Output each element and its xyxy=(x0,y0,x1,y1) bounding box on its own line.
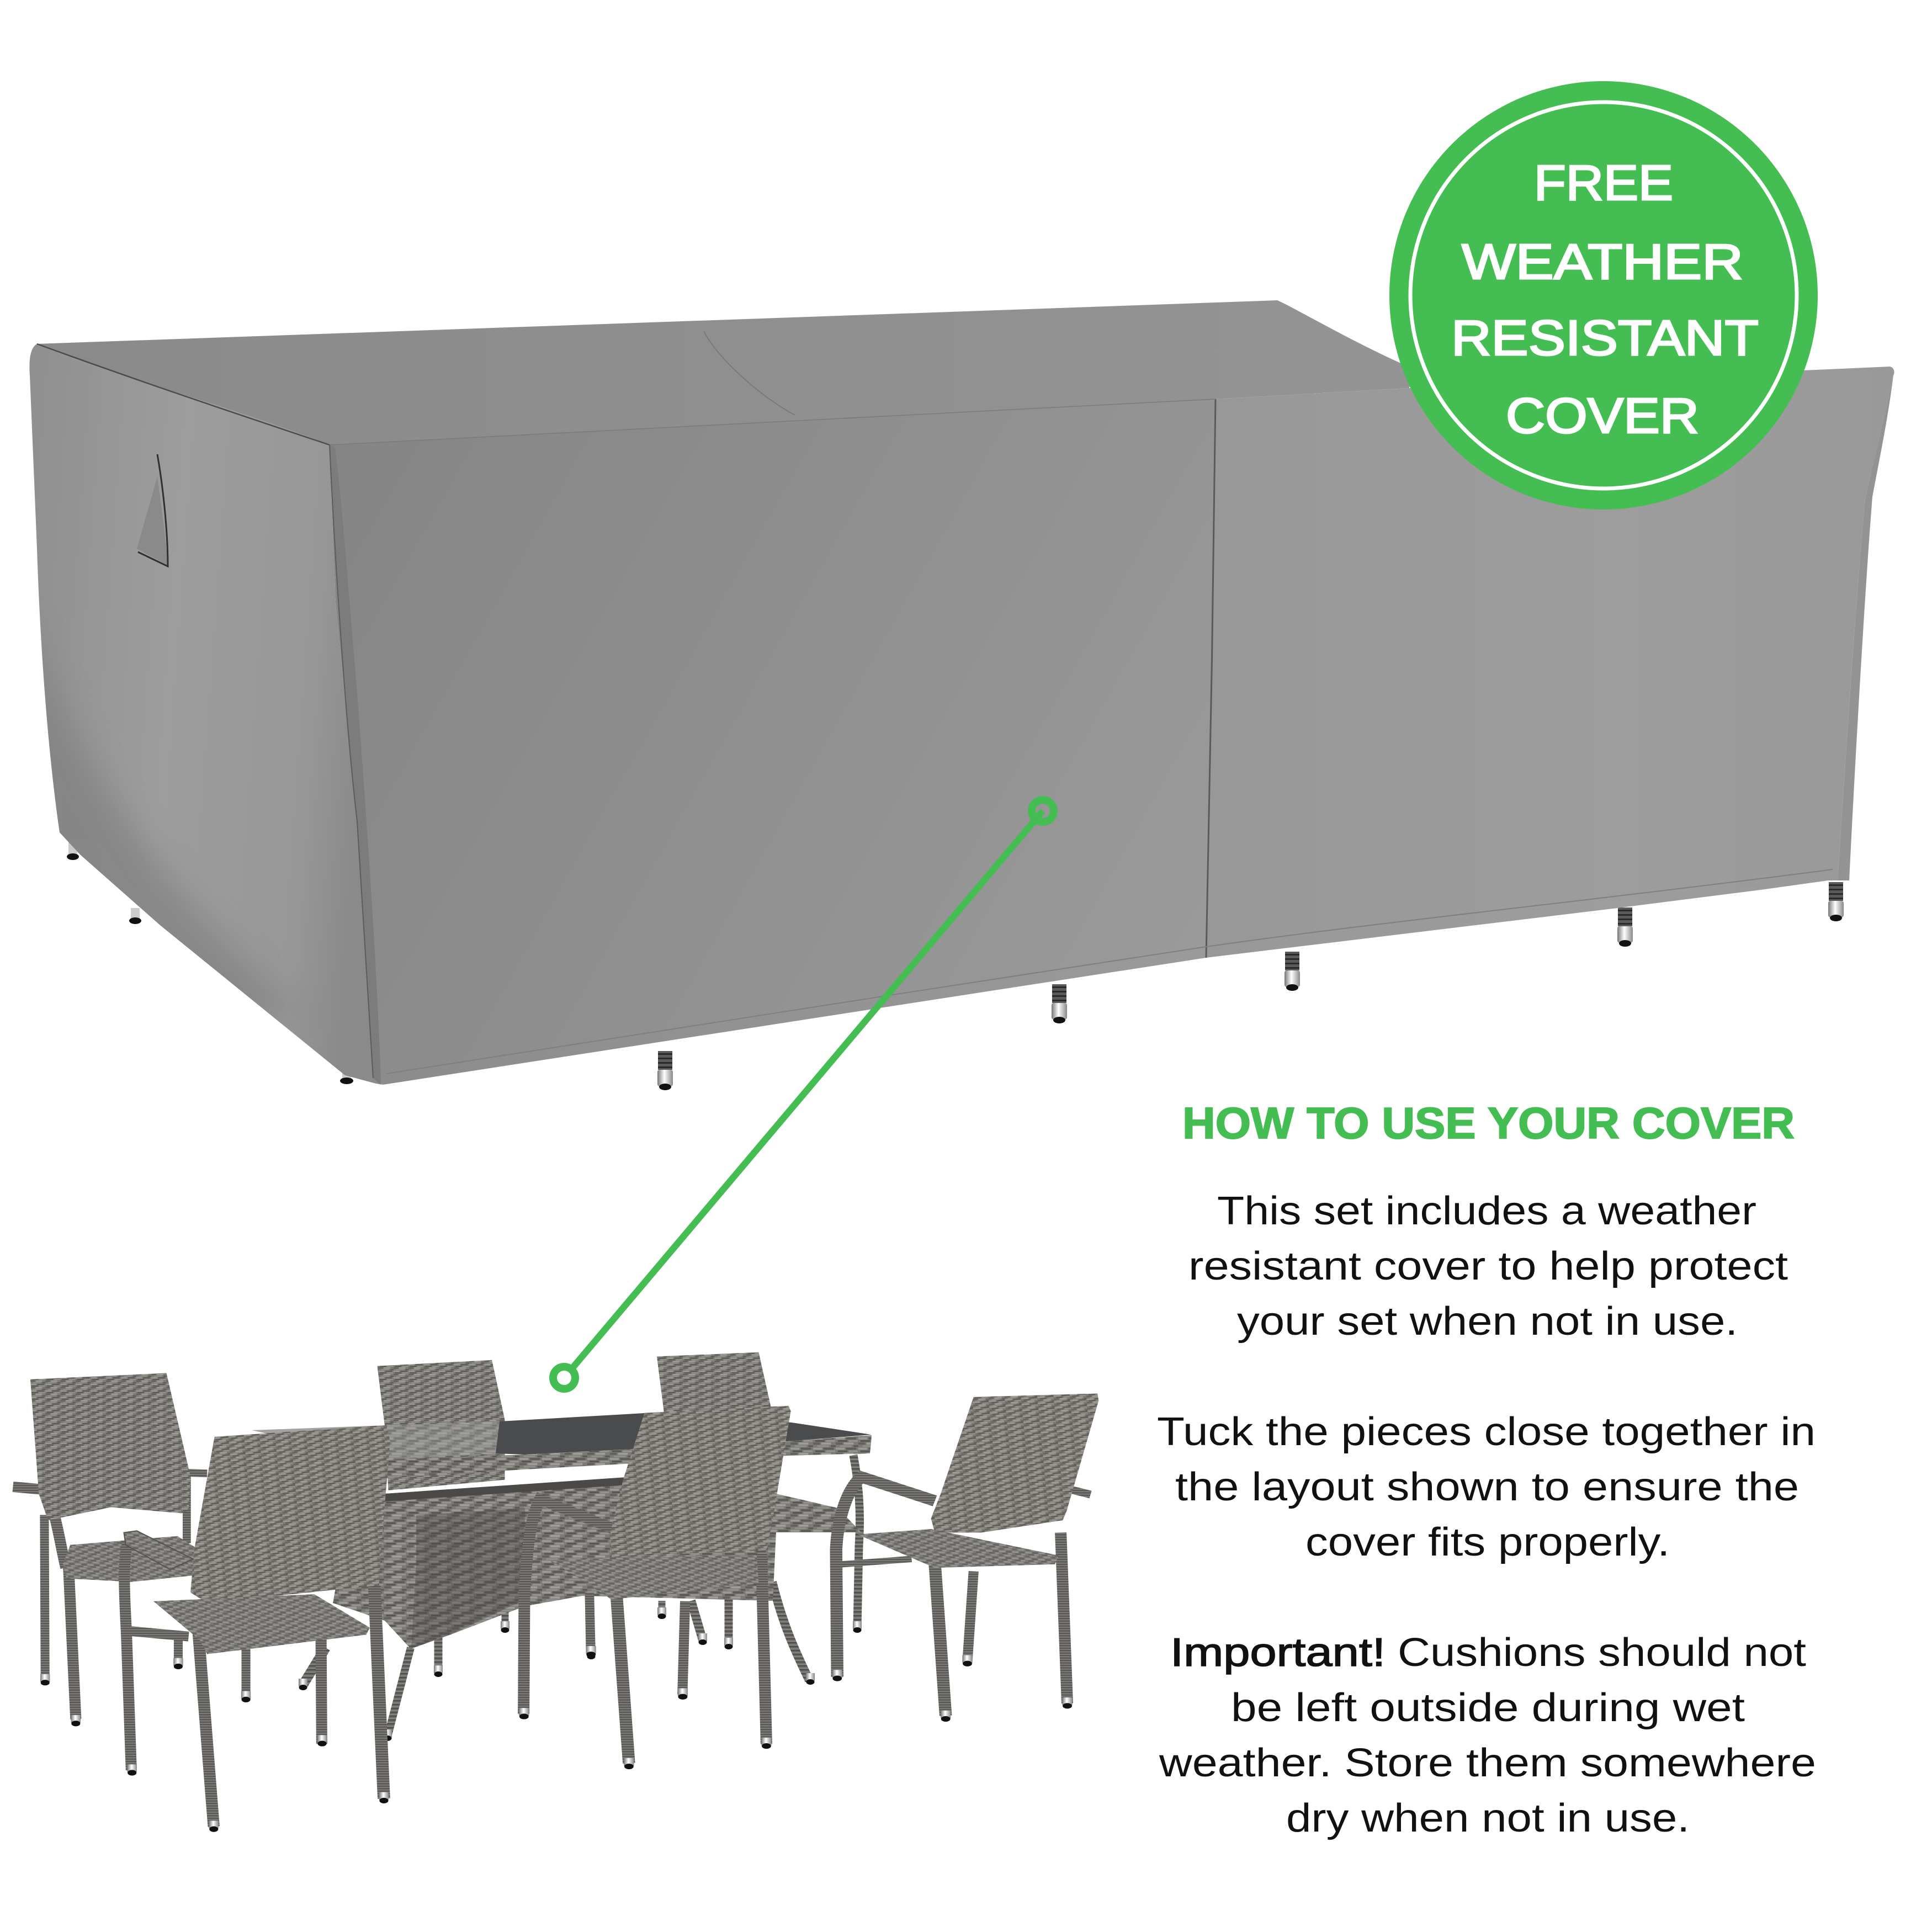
paragraph: what the set includes: This set includes a weather xyxy=(1217,1189,1756,1233)
table xyxy=(299,1455,862,1741)
table shelf dark band xyxy=(385,1477,627,1501)
table rear legs xyxy=(303,1455,860,1735)
table feet xyxy=(299,1607,862,1741)
chair: rear left xyxy=(13,1373,251,1726)
chair: right xyxy=(832,1393,1098,1722)
heading: HOW TO USE YOUR COVER xyxy=(1182,1098,1795,1148)
paragraph: important cushion note: dry when not in use. xyxy=(1286,1796,1690,1840)
badge: free weather resistant cover xyxy=(1389,81,1818,509)
cover handle xyxy=(137,454,168,566)
uncovered furniture set xyxy=(13,1352,1098,1832)
table top glass, light section xyxy=(252,1421,500,1459)
badge: free weather resistant cover: WEATHER xyxy=(1462,235,1743,290)
cover left panel shadow xyxy=(42,654,278,1018)
callout line linking cover to furniture xyxy=(553,800,1054,1389)
table under panel xyxy=(333,1477,861,1649)
cover corner seam xyxy=(330,445,381,1085)
cover front panel xyxy=(330,399,1216,1085)
paragraph: what the set includes: resistant cover to help protect xyxy=(1188,1244,1788,1288)
paragraph: important cushion note: Important! xyxy=(1170,1631,1386,1675)
chair: front left xyxy=(124,1425,390,1832)
table top rim xyxy=(386,1435,872,1478)
paragraph: what the set includes: your set when not in use. xyxy=(1237,1299,1738,1344)
cover marker ring xyxy=(1032,800,1054,822)
paragraph: important cushion note xyxy=(1159,1631,1816,1840)
cover feet xyxy=(67,839,1844,1090)
rear chairs and table top in upscaled coords xyxy=(377,1360,505,1490)
badge: free weather resistant cover: COVER xyxy=(1506,389,1699,444)
paragraph: what the set includes xyxy=(1188,1189,1788,1344)
chair: front centre xyxy=(519,1406,791,1769)
cover left panel xyxy=(29,344,383,1085)
cover right panel xyxy=(1206,367,1894,958)
paragraph: how to tuck the pieces: cover fits properly. xyxy=(1305,1520,1670,1564)
cover seam lines xyxy=(37,331,1833,1074)
cover right edge sleeve xyxy=(1838,375,1893,880)
paragraph: important cushion note: weather. Store them somewhere xyxy=(1159,1741,1816,1785)
cover top panel xyxy=(37,300,1413,445)
badge: free weather resistant cover: RESISTANT xyxy=(1451,311,1759,366)
paragraph: important cushion note: be left outside during wet xyxy=(1231,1686,1745,1730)
covered furniture set xyxy=(22,300,1894,1090)
chair: back right xyxy=(657,1352,780,1476)
table top glass, dark section xyxy=(496,1413,872,1455)
badge: free weather resistant cover: FREE xyxy=(1534,156,1673,211)
furniture marker ring xyxy=(553,1367,575,1389)
chair: back centre xyxy=(377,1360,505,1490)
paragraph: how to tuck the pieces: Tuck the pieces close together in xyxy=(1157,1410,1816,1454)
paragraph: how to tuck the pieces xyxy=(1157,1410,1816,1564)
paragraph: how to tuck the pieces: the layout shown to ensure the xyxy=(1175,1465,1799,1509)
paragraph: important cushion note: Cushions should not xyxy=(1398,1631,1806,1675)
